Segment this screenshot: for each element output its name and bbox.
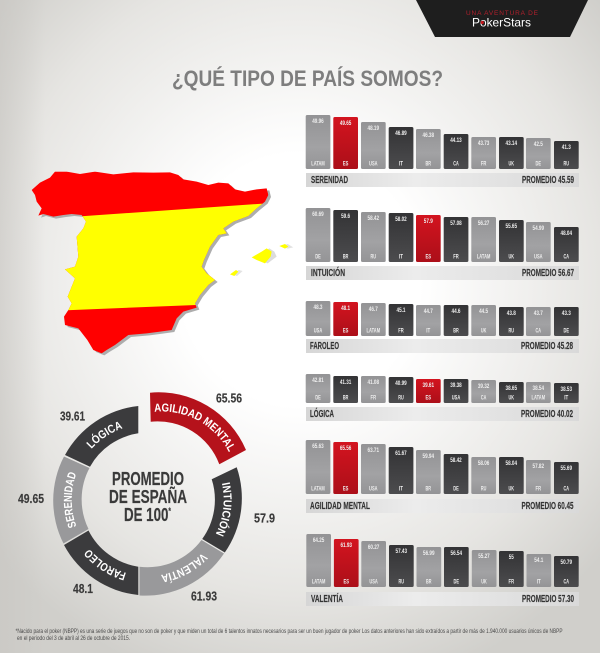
bar chart: Intuición: FR [453,253,459,260]
centre text: DE 100 [124,505,184,525]
bar chart: Faroleo: 44.5 [479,308,488,315]
label strip: Intuición [306,266,579,280]
bar chart: Serenidad: 42.5 [534,141,543,148]
bar chart: Lógica: DE [315,394,321,401]
bar chart: Lógica: 42.81 [312,377,324,384]
segment: Faroleo: FAROLEO [84,550,126,580]
bar chart: Valentía: 56.54 [451,550,462,557]
bar chart: Lógica: FR [371,394,376,401]
bar chart: Intuición: CA [564,253,569,260]
label strip: Agilidad mental: AGILIDAD MENTAL [310,501,370,512]
bar chart: Valentía: 60.27 [368,544,380,551]
value: Valentía: 61.93 [191,590,217,604]
bar chart: Serenidad: 46.38 [423,132,434,139]
bar chart: Faroleo: DE [564,327,569,334]
bar chart: Faroleo: 48.3 [314,304,323,311]
bar chart: Intuición: 59.6 [341,213,350,220]
bar chart: Agilidad mental: RU [481,485,487,492]
bar chart: Faroleo: IT [426,327,430,334]
segment: Intuición [202,467,242,552]
bar chart: Serenidad: ES [343,160,349,167]
bar chart: Faroleo: 43.8 [507,310,516,317]
value: Agilidad mental: 65.56 [216,392,242,406]
segment: Lógica: LÓGICA [86,422,122,448]
bar chart: Lógica: ES [426,394,431,401]
segment: Faroleo [64,530,138,595]
bar chart: Faroleo: 43.3 [562,310,571,317]
bar chart: Lógica [306,374,579,421]
bar chart: Lógica: RU [398,394,404,401]
bar chart: Intuición: 57.9 [424,218,433,225]
bar chart: Agilidad mental: 63.71 [368,447,379,454]
bar chart: Agilidad mental: IT [399,485,403,492]
bar chart: Faroleo: USA [314,327,322,334]
segment: Serenidad [53,456,90,544]
footnote: en el periodo del 3 de abril al 26 de octubre de 2015. [17,635,130,642]
bar chart: Intuición: DE [315,253,321,260]
bar chart: Intuición: LATAM [477,253,490,260]
centre text: * [168,506,171,516]
bar chart: Agilidad mental: LATAM [311,485,325,492]
bar chart: Valentía: 55 [509,554,514,561]
bar chart: Valentía: 55.27 [478,553,490,560]
centre text: DE ESPAÑA [109,486,187,507]
bar chart: Valentía: USA [369,578,378,585]
bar chart: Serenidad: 48.19 [368,125,379,132]
donut chart: promedio de España [18,392,275,604]
bar chart: Lógica: BR [343,394,349,401]
bar chart: Intuición [306,208,579,280]
bar chart: Valentía: 54.1 [534,557,544,564]
bar chart: Intuición: 58.42 [368,215,379,222]
label strip: Serenidad: SERENIDAD [311,175,348,186]
bar chart: Serenidad: FR [481,160,487,167]
bar chart: Agilidad mental: 61.67 [395,450,407,457]
bar chart: Valentía: UK [481,578,487,585]
bar chart: Faroleo: CA [536,327,541,334]
bar chart: Serenidad: USA [369,160,378,167]
bar chart: Serenidad: 46.89 [395,130,407,137]
segment: Valentía [140,540,224,596]
title: ¿QUÉ TIPO DE PAÍS SOMOS? [172,66,443,91]
bar chart: Lógica: UK [509,394,514,401]
header: PokerStars tab: UNA AVENTURA DE [466,10,539,17]
bar chart: Faroleo: RU [509,327,514,334]
bar chart: Faroleo [306,301,579,353]
bar chart: Agilidad mental: 58.06 [478,460,490,467]
bar chart: Lógica: 39.38 [450,382,462,389]
bar chart: Faroleo: ES [343,327,349,334]
bar chart: Agilidad mental: 59.94 [423,453,434,460]
segment: Agilidad mental (highlighted): AGILIDAD MENTAL [154,404,234,452]
bar chart: Agilidad mental [306,440,579,513]
centre text: PROMEDIO [112,469,184,489]
bar chart: Faroleo: BR [453,327,459,334]
bar chart: Agilidad mental: 55.69 [561,465,572,472]
bar chart: Serenidad: 43.73 [478,140,490,147]
label strip: Faroleo: FAROLEO [310,341,339,352]
bar chart: Serenidad: IT [399,160,403,167]
bar chart: Valentía: CA [564,578,569,585]
bar chart: Intuición: 55.65 [506,223,517,230]
bar chart: Lógica: 38.54 [533,385,544,392]
bar chart: Valentía: 50.79 [561,559,572,566]
label strip: Lógica: LÓGICA [310,407,334,420]
bar chart: Agilidad mental: USA [369,485,378,492]
bar chart: Valentía: FR [509,578,514,585]
bar chart: Serenidad: 49.65 [340,120,352,127]
bar chart: Agilidad mental: 65.63 [312,443,324,450]
bar chart: Serenidad: 41.3 [562,144,571,151]
bar chart: Valentía [306,534,579,606]
bar chart: Lógica: 38.53 [561,386,572,393]
value: Lógica: 39.61 [60,410,85,424]
header: PokerStars tab [416,0,588,37]
bar chart: Intuición: 48.04 [561,230,572,237]
value: Faroleo: 48.1 [73,582,93,596]
label strip: Intuición: INTUICIÓN [311,266,345,279]
bar chart: Valentía: IT [537,578,541,585]
bar chart: Faroleo: 48.1 [341,305,350,312]
bar chart: Serenidad: 44.13 [450,137,462,144]
bar chart: Faroleo: LATAM [367,327,380,334]
bar chart: Lógica: LATAM [532,394,545,401]
bar chart: Lógica: 41.08 [368,379,379,386]
bar chart: Agilidad mental: ES [343,485,349,492]
bar chart: Intuición: BR [343,253,349,260]
label strip: Serenidad [306,173,579,187]
bar chart: Serenidad: BR [426,160,431,167]
bar chart: Intuición: 56.27 [478,220,490,227]
bar chart: Lógica: 39.32 [478,383,490,390]
bar chart: Valentía: RU [399,578,404,585]
bar chart: Lógica: 39.61 [423,382,434,389]
bar chart: Agilidad mental: 58.42 [450,457,462,464]
bar chart: Intuición: UK [509,253,514,260]
bar chart: Valentía: 57.43 [396,548,407,555]
bar chart: Agilidad mental: BR [426,485,431,492]
bar chart: Lógica: 38.65 [506,385,517,392]
bar chart: Intuición: 57.08 [450,220,462,227]
bar chart: Intuición: ES [426,253,431,260]
label strip: Lógica [306,407,579,421]
value: Intuición: 57.9 [254,512,275,526]
bar chart: Agilidad mental: CA [564,485,569,492]
bar chart: Lógica: 40.99 [395,380,407,387]
bar chart: Intuición: 54.99 [533,225,544,232]
bar chart: Lógica: 41.31 [340,379,352,386]
bar chart: Serenidad [306,115,579,187]
bar chart: Serenidad: 43.14 [506,140,517,147]
bar chart: Intuición: IT [399,253,403,260]
bar chart: Serenidad: 49.96 [312,118,324,125]
bar chart: Agilidad mental: DE [453,485,459,492]
bar chart: Valentía: 56.99 [423,550,435,557]
bar chart: Faroleo: 43.7 [534,310,543,317]
label strip: Faroleo [306,339,579,353]
bar chart: Agilidad mental: 65.56 [340,445,352,452]
bar chart: Faroleo: 44.7 [424,308,433,315]
bar chart: Serenidad: CA [453,160,459,167]
bar chart: Faroleo: 46.7 [369,306,378,313]
bar chart: Agilidad mental: UK [509,485,514,492]
bar chart: Agilidad mental: 57.82 [533,463,544,470]
bar chart: Valentía: ES [343,578,349,585]
bar chart: Intuición: RU [371,253,376,260]
bar chart: Lógica: IT [564,394,568,401]
bar chart: Valentía: BR [426,578,432,585]
bar chart: Intuición: USA [534,253,543,260]
bar chart: Serenidad: LATAM [311,160,325,167]
segment: Intuición: INTUICIÓN [216,482,232,537]
bar chart: Lógica: CA [481,394,487,401]
segment: Agilidad mental (highlighted) [150,392,246,464]
value: Serenidad: 49.65 [18,492,44,506]
bar chart: Valentía: 61.93 [340,542,352,549]
segment: Serenidad: SERENIDAD [64,472,76,528]
centre text [109,469,187,525]
segment: Valentía: VALENTÍA [161,554,208,584]
bar chart: Faroleo: 45.1 [396,307,406,314]
label strip: Valentía [306,592,579,606]
map of Spain with flag colours [27,167,293,360]
bar chart: Valentía: 64.25 [313,537,325,544]
segment: Lógica [65,406,138,467]
bar chart: Agilidad mental: 58.04 [506,460,517,467]
footnote [16,628,562,642]
bar chart: Valentía: DE [454,578,459,585]
bar chart: Valentía: LATAM [312,578,325,585]
bar chart: Faroleo: 44.6 [452,308,461,315]
bar chart: Faroleo: FR [398,327,404,334]
bar chart: Serenidad: RU [564,160,569,167]
bar chart: Serenidad: DE [536,160,541,167]
header: PokerStars tab: PokerStars [472,16,531,30]
bar chart: Intuición: 58.02 [395,216,407,223]
bar chart: Agilidad mental: FR [536,485,541,492]
label strip: Agilidad mental [306,499,579,513]
bar chart: Faroleo: UK [481,327,487,334]
bar chart: Serenidad: UK [509,160,514,167]
label strip: Valentía: VALENTÍA [311,592,343,605]
bar chart: Lógica: USA [452,394,460,401]
bar chart: Intuición: 60.69 [312,211,324,218]
